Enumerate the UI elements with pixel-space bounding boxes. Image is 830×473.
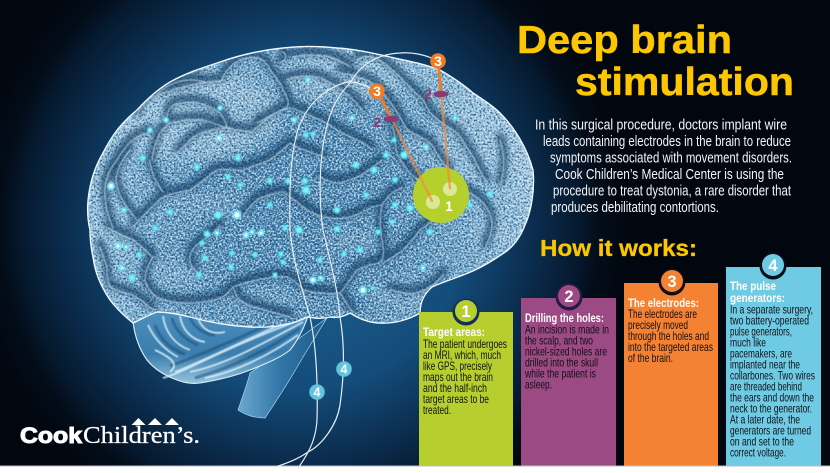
panel 4: the pulse generators: on and set to the xyxy=(730,436,794,448)
title: stimulation xyxy=(575,61,794,104)
panel 2: drilling the holes xyxy=(521,284,616,466)
panel 1: target areas: The patient undergoes xyxy=(423,338,507,351)
panel 2: drilling the holes: An incision is made in xyxy=(525,324,609,336)
target area circle: 1 xyxy=(445,198,453,214)
panel 1: target areas xyxy=(419,298,513,466)
heading: how it works: How it works: xyxy=(540,235,697,261)
brain stem xyxy=(238,318,327,418)
glowing neuron lights xyxy=(108,78,492,293)
marker: wire 4 right: 4 xyxy=(341,362,348,376)
marker: wire 4 right xyxy=(336,361,352,377)
panel 3: the electrodes: precisely moved xyxy=(628,319,688,332)
panel 4: the pulse generators: generators: xyxy=(730,291,785,305)
panel 4: the pulse generators: implanted near the xyxy=(730,358,800,372)
marker: wire 4 left: 4 xyxy=(314,386,321,400)
panel 3: the electrodes: into the targeted areas xyxy=(628,341,713,354)
electrode leads xyxy=(377,61,450,201)
panel 4: the pulse generators: pulse generators, xyxy=(730,326,792,338)
panel 2: drilling the holes: Drilling the holes: xyxy=(525,311,604,325)
panel 1: target areas: treated. xyxy=(423,404,451,417)
panel 3: the electrodes: The electrodes are xyxy=(628,308,697,321)
title xyxy=(517,19,794,104)
target area circle xyxy=(413,167,469,223)
marker: electrode 3 right: 3 xyxy=(434,53,442,69)
panel 1: target areas: 1 xyxy=(461,303,471,321)
marker: wire 4 left xyxy=(309,384,325,400)
marker: electrode 3 right xyxy=(430,53,446,69)
panel 1: target areas: Target areas: xyxy=(423,325,485,339)
logo: Cook Children's: Cook xyxy=(20,423,83,448)
intro text: produces debilitating contortions. xyxy=(551,200,719,216)
intro text: In this surgical procedure, doctors implant wire xyxy=(535,118,787,134)
intro text: Cook Children’s Medical Center is using the xyxy=(555,167,784,183)
panel 2: drilling the holes: asleep. xyxy=(525,378,552,392)
label: drill hole 2 left: 2 xyxy=(373,115,381,130)
panel 1: target areas: target areas to be xyxy=(423,393,489,406)
cerebellum xyxy=(133,310,308,383)
title: Deep brain xyxy=(517,19,732,62)
panel 4: the pulse generators: pacemakers, are xyxy=(730,348,792,360)
panel 1: target areas: an MRI, which, much xyxy=(423,349,501,362)
panel 2: drilling the holes: drilled into the skull xyxy=(525,356,598,370)
panel 4: the pulse generators xyxy=(726,252,821,466)
panel 4: the pulse generators: 4 xyxy=(768,257,778,275)
panel 1: target areas: like GPS, precisely xyxy=(423,360,492,373)
panel 2: drilling the holes: while the patient is xyxy=(524,368,596,380)
electrode wires xyxy=(275,53,438,468)
panel 3: the electrodes: of the brain. xyxy=(628,352,673,365)
panel 4: the pulse generators: The pulse xyxy=(730,279,776,293)
panel 2: drilling the holes: 2 xyxy=(564,288,574,306)
panel 3: the electrodes: through the holes and xyxy=(628,330,709,343)
marker: electrode 3 left xyxy=(369,83,385,99)
panel 2: drilling the holes: nickel-sized holes are xyxy=(525,346,607,358)
intro text xyxy=(535,118,792,216)
label: drill hole 2 right: 2 xyxy=(424,87,432,102)
logo: Cook Children's: Children’s. xyxy=(83,423,200,449)
panel 3: the electrodes: 3 xyxy=(667,273,677,291)
logo: Cook Children's xyxy=(20,418,200,449)
panel 4: the pulse generators: At a later date, the xyxy=(730,414,800,426)
panel 4: the pulse generators: correct voltage. xyxy=(730,446,786,460)
brain xyxy=(80,40,540,335)
panel 1: target areas: maps out the brain xyxy=(423,371,493,384)
panel 3: the electrodes xyxy=(624,268,718,466)
panel 1: target areas: and the half-inch xyxy=(423,382,487,395)
marker: electrode 3 left: 3 xyxy=(373,83,381,99)
panel 2: drilling the holes: the scalp, and two xyxy=(525,334,593,348)
panel 4: the pulse generators: much like xyxy=(730,336,766,350)
panel 3: the electrodes: The electrodes: xyxy=(628,296,699,310)
